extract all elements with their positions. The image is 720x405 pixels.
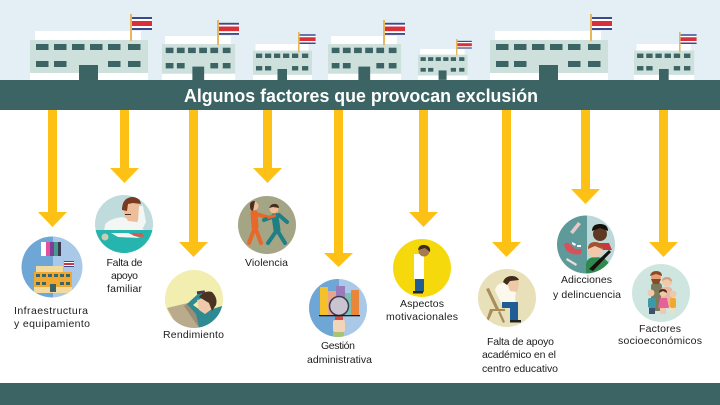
label: infraestructura: y equipamiento (14, 318, 90, 330)
building 7 (634, 32, 697, 80)
title: Algunos factores que provocan exclusión (184, 86, 538, 106)
arrow 9 (649, 110, 678, 257)
label: aspectos motivacionales (386, 298, 458, 323)
bottom band (0, 383, 720, 405)
icon: family support (95, 195, 153, 254)
arrows (38, 110, 678, 267)
label: falta de apoyo familiar: familiar (107, 283, 142, 295)
label: adicciones y delincuencia: Adicciones (561, 274, 612, 286)
building 2 (162, 20, 239, 80)
label: gestión administrativa: administrativa (307, 354, 372, 366)
icon: performance (165, 270, 223, 330)
label: aspectos motivacionales: motivacionales (386, 311, 458, 323)
label: falta de apoyo académico: Falta de apoyo (487, 336, 554, 348)
icon: motivation (393, 238, 451, 298)
arrow 2 (110, 110, 139, 183)
arrow 1 (38, 110, 67, 227)
label: adicciones y delincuencia: y delincuencia (553, 289, 621, 301)
label: falta de apoyo académico: centro educativo (482, 363, 558, 375)
label: falta de apoyo académico: académico en el (482, 349, 556, 361)
label: falta de apoyo familiar: Falta de (106, 257, 143, 269)
icon: violence (238, 196, 296, 254)
label: gestión administrativa: Gestión (321, 340, 355, 352)
label: infraestructura: Infraestructura (14, 305, 88, 317)
label: factores socioeconómicos (618, 323, 702, 347)
label: falta de apoyo familiar (106, 257, 143, 295)
building 1 (30, 14, 152, 80)
label: violencia: Violencia (245, 257, 288, 269)
label: infraestructura (14, 305, 90, 330)
label: factores socioeconómicos: socioeconómicos (618, 335, 702, 347)
icon: family (632, 264, 690, 322)
school buildings row (30, 14, 697, 80)
label: adicciones y delincuencia (553, 274, 621, 301)
building 6 (490, 14, 612, 80)
arrow 3 (179, 110, 208, 257)
icon: administrative management (309, 279, 368, 338)
arrow 7 (492, 110, 521, 257)
icon: infrastructure (20, 236, 85, 298)
arrow 5 (324, 110, 353, 267)
label: rendimiento: Rendimiento (163, 329, 224, 341)
label: gestión administrativa (307, 340, 372, 366)
building 5 (418, 39, 472, 80)
icon: academic support (478, 269, 536, 327)
icon: addictions and delinquency (557, 215, 616, 276)
label: falta de apoyo académico (482, 336, 558, 375)
label: falta de apoyo familiar: apoyo (111, 270, 138, 282)
arrow 6 (409, 110, 438, 227)
label: aspectos motivacionales: Aspectos (400, 298, 444, 310)
arrow 8 (571, 110, 600, 204)
arrow 4 (253, 110, 282, 183)
building 4 (328, 20, 405, 80)
title band (0, 80, 720, 110)
sky background (0, 0, 720, 81)
label: factores socioeconómicos: Factores (639, 323, 681, 335)
building 3 (253, 32, 316, 80)
